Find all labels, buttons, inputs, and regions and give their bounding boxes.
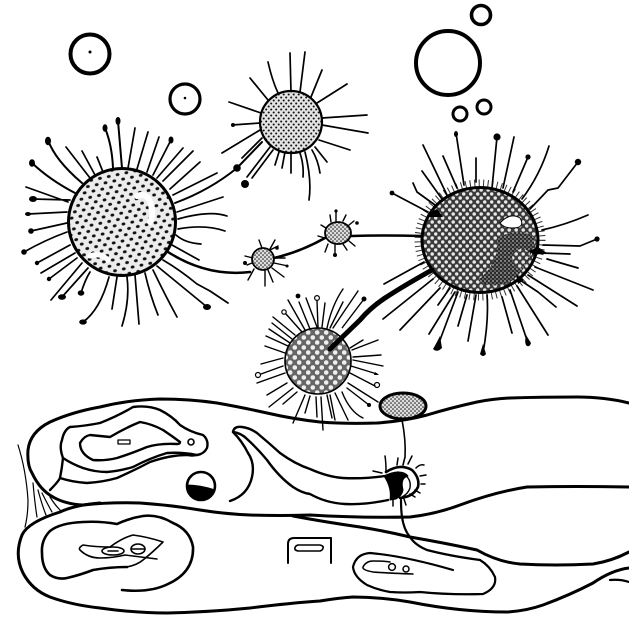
spine tips of right cell xyxy=(390,131,600,356)
cell: lower spiky cell xyxy=(256,289,383,430)
spines of lower cell xyxy=(257,289,383,430)
ring: top right small xyxy=(472,6,490,24)
tip hairs xyxy=(373,456,426,506)
dark textured patch of right cell xyxy=(478,232,535,286)
thin strand and lower right organelle xyxy=(353,500,495,594)
spine tips of tiny middle cell xyxy=(333,209,359,257)
membrane: upper elongated cell xyxy=(28,397,629,517)
tip cell with hairs xyxy=(373,456,426,506)
tip ring xyxy=(386,467,418,498)
cell: tiny middle cell xyxy=(318,209,359,257)
pale patch of right cell xyxy=(512,249,530,270)
connecting strand from left cell xyxy=(168,252,250,273)
fuzz around right cell xyxy=(418,183,542,297)
bracket symbol in lower cell xyxy=(288,538,331,563)
body of right cell xyxy=(422,188,538,292)
inner curve of lower right organelle xyxy=(363,561,413,574)
body of lower cell xyxy=(285,328,351,394)
thin strand from oval to tip xyxy=(402,420,405,465)
notch in lower cell xyxy=(334,327,352,346)
ring: bubble right xyxy=(477,100,491,114)
spines of left cell xyxy=(24,121,237,326)
spine tips of lower cell xyxy=(256,294,380,407)
spines of tiny middle cell xyxy=(318,211,358,254)
ring: top right large xyxy=(416,31,480,95)
spines of tiny left cell xyxy=(245,240,288,286)
body of top cell xyxy=(260,91,322,153)
small circle in organelle xyxy=(188,439,194,445)
body of tiny left cell xyxy=(252,248,274,270)
ring: top left large xyxy=(70,34,110,74)
thick strand: right cell to lower cell xyxy=(330,270,432,349)
body of tiny middle cell xyxy=(325,222,351,244)
tip dark crescent xyxy=(384,472,408,500)
dark wedge lower right on right cell xyxy=(516,275,524,284)
cell: tiny left cell xyxy=(243,240,288,286)
pale vacuole of right cell xyxy=(500,216,522,228)
oval cell on membrane xyxy=(380,393,426,419)
small rectangle in organelle xyxy=(118,440,130,444)
organelle: lower left body xyxy=(42,516,193,591)
highlight in left cell xyxy=(137,195,152,222)
dark wedge right on right cell xyxy=(529,247,547,255)
strand to right cell xyxy=(351,234,422,237)
cell: large right spiky cell xyxy=(383,131,600,356)
ring: bubble left xyxy=(453,107,467,121)
membrane: lower elongated cell xyxy=(18,503,629,613)
tip inner arc xyxy=(398,472,410,497)
circles in lower right organelle xyxy=(389,564,409,572)
spine tips of left cell xyxy=(21,117,211,325)
dark wedge left on right cell xyxy=(428,209,443,217)
cell: top spiky cell xyxy=(222,52,368,200)
spine tips of top cell xyxy=(231,123,249,188)
ring: top left small xyxy=(170,84,200,114)
strand between tiny cells xyxy=(274,238,325,258)
spines of right cell xyxy=(383,133,597,353)
thin strands at far left xyxy=(18,445,60,527)
half black ball xyxy=(187,472,215,500)
pale patch in left cell xyxy=(90,255,108,260)
curved tube ending in tip xyxy=(230,427,388,504)
cell: large left spiky cell xyxy=(21,117,250,326)
spines of top cell xyxy=(222,52,368,200)
organelle: upper left folded body xyxy=(50,406,208,490)
spine tips of tiny left cell xyxy=(243,246,288,268)
body of left cell xyxy=(68,168,176,276)
